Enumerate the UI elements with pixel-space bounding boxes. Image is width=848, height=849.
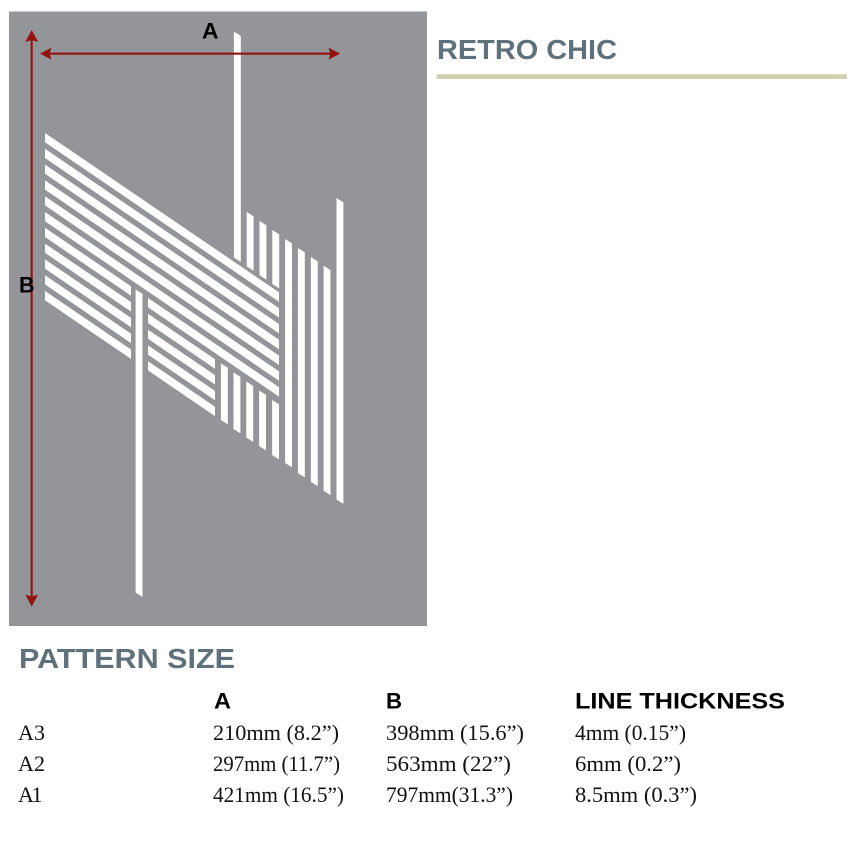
row: A2: A2 bbox=[18, 751, 45, 776]
row: A3: 210mm (8.2”) bbox=[213, 720, 339, 745]
pattern: diagonal stripes bbox=[45, 133, 279, 416]
row: A3: A3 bbox=[18, 720, 45, 745]
row: A1: 8.5mm (0.3”) bbox=[575, 782, 697, 807]
title underline bbox=[436, 74, 847, 79]
table header bbox=[214, 688, 785, 714]
row: A1: 797mm(31.3”) bbox=[386, 782, 513, 807]
row: A2: 563mm (22”) bbox=[386, 751, 511, 776]
row: A3: 4mm (0.15”) bbox=[575, 720, 686, 745]
panel: pattern diagram bbox=[9, 12, 427, 626]
title: Retro Chic: RETRO CHIC bbox=[437, 34, 617, 65]
table header: A bbox=[214, 688, 231, 714]
row: A2: 297mm (11.7”) bbox=[213, 751, 340, 776]
row: A2: 6mm (0.2”) bbox=[575, 751, 681, 776]
pattern: vertical stripes bbox=[136, 32, 343, 597]
row: A1 bbox=[18, 782, 697, 807]
row: A1: 421mm (16.5”) bbox=[213, 782, 344, 807]
arrow: dimension A bbox=[40, 48, 340, 60]
row: A3 bbox=[18, 720, 686, 745]
label: B: B bbox=[19, 272, 34, 298]
table header: B bbox=[386, 688, 402, 714]
arrow: dimension B bbox=[25, 30, 38, 606]
row: A3: 398mm (15.6”) bbox=[386, 720, 524, 745]
label: A: A bbox=[202, 18, 219, 44]
row: A2 bbox=[18, 751, 681, 776]
row: A1: 1 bbox=[32, 782, 42, 807]
table header: LINE THICKNESS bbox=[575, 688, 785, 714]
heading: Pattern Size: PATTERN SIZE bbox=[19, 643, 235, 674]
table: pattern sizes bbox=[18, 688, 785, 807]
row: A1: A bbox=[18, 782, 34, 807]
